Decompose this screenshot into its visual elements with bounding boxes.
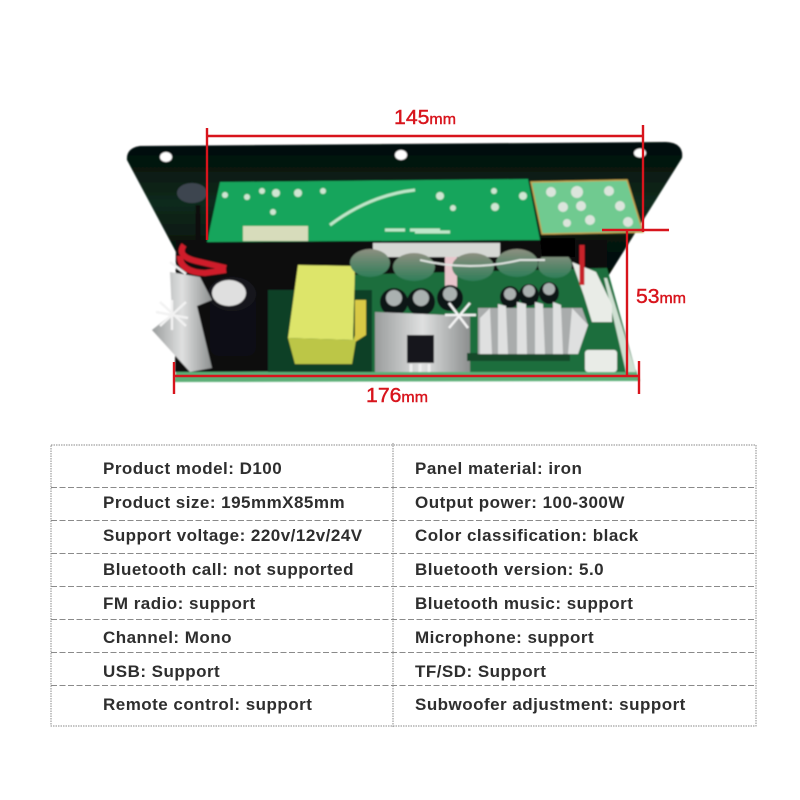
left column specs: USB: Support <box>103 662 220 681</box>
taped cable bundle on panel <box>177 183 207 240</box>
center heat sink <box>375 303 476 372</box>
small solder-side PCB <box>531 180 643 234</box>
red connector wire <box>580 245 584 285</box>
left column specs: Product size: 195mmX85mm <box>103 493 345 512</box>
right heat sink with fins <box>467 302 588 361</box>
left column specs <box>103 459 363 714</box>
dimension: 176mm: 176mm <box>366 385 428 407</box>
small capacitors <box>380 282 559 316</box>
red power wires <box>180 245 226 273</box>
black metal panel <box>127 142 682 278</box>
left column specs: Channel: Mono <box>103 628 232 647</box>
right column specs: Output power: 100-300W <box>415 493 625 512</box>
product photo: amplifier board <box>127 142 682 382</box>
left heat sink <box>152 262 212 372</box>
white signal wire <box>420 260 545 266</box>
dimension: 145mm <box>207 107 643 240</box>
white ribbon connectors <box>373 243 500 291</box>
right column specs: Bluetooth version: 5.0 <box>415 560 604 579</box>
right column specs: TF/SD: Support <box>415 662 546 681</box>
mounting holes <box>160 148 646 162</box>
dimension: 53mm: 53mm <box>636 286 686 308</box>
left column specs: Product model: D100 <box>103 459 282 478</box>
left column specs: Remote control: support <box>103 695 312 714</box>
left column specs: Bluetooth call: not supported <box>103 560 354 579</box>
dimension: 176mm <box>174 361 639 407</box>
specification table <box>51 443 756 727</box>
right column specs: Microphone: support <box>415 628 594 647</box>
lower green circuit board <box>174 370 640 382</box>
right column specs: Subwoofer adjustment: support <box>415 695 686 714</box>
table grid <box>51 443 756 727</box>
row of large capacitors <box>350 249 572 281</box>
main green display PCB <box>207 179 540 242</box>
dimension: 145mm: 145mm <box>394 107 456 129</box>
right column specs: Bluetooth music: support <box>415 594 633 613</box>
black block under the daughter board <box>540 238 575 257</box>
main capacitor <box>208 277 256 356</box>
white connectors <box>572 262 617 372</box>
left column specs: Support voltage: 220v/12v/24V <box>103 526 363 545</box>
right column specs: Color classification: black <box>415 526 639 545</box>
interior of the board <box>175 240 622 372</box>
yellow transformer <box>288 265 366 364</box>
dimension: 53mm <box>602 230 686 376</box>
right column specs: Panel material: iron <box>415 459 582 478</box>
left column specs: FM radio: support <box>103 594 256 613</box>
right column specs <box>415 459 686 714</box>
